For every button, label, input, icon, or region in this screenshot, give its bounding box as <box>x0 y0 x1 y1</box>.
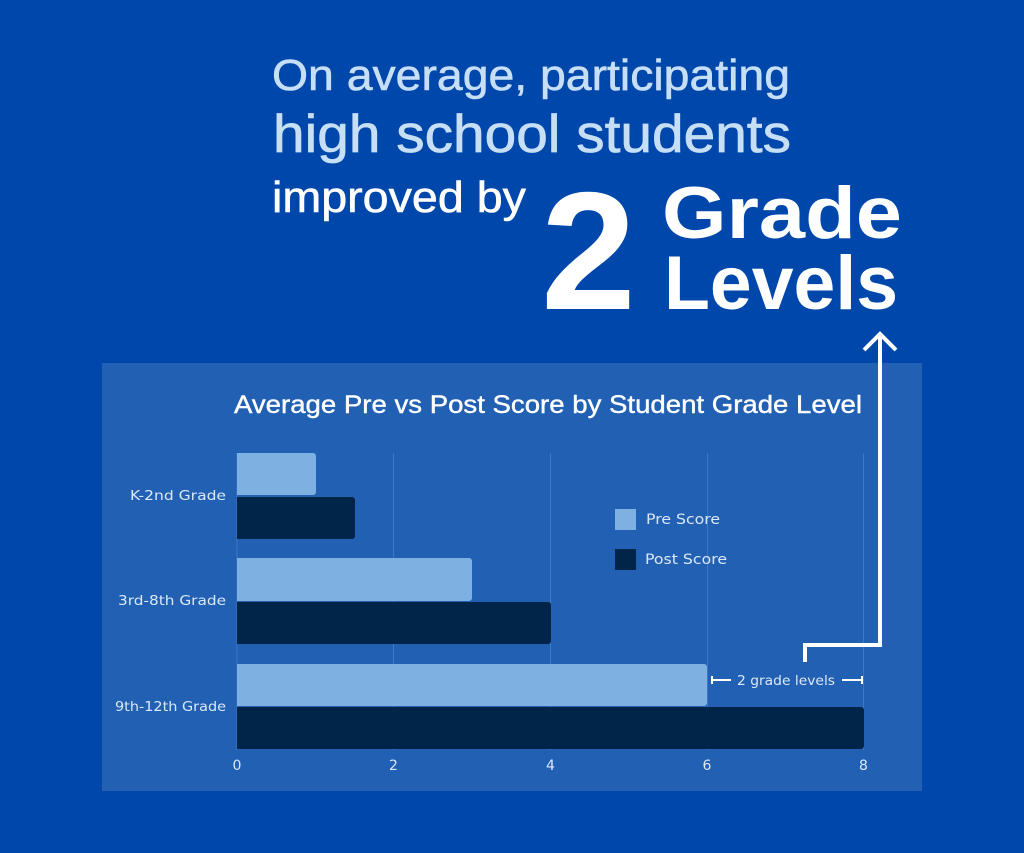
legend: Post Score <box>645 552 727 568</box>
headline <box>272 51 791 222</box>
panel: bar chart <box>102 363 922 791</box>
category labels: K-2nd Grade <box>130 488 226 504</box>
bars: K-2nd Grade <box>237 453 355 539</box>
big stat: 2 grade levels <box>541 157 902 345</box>
x axis labels: 6 <box>703 758 712 774</box>
bars: 9th-12th Grade <box>237 664 864 749</box>
word Grade: Grade <box>662 173 902 254</box>
category labels: 3rd-8th Grade <box>118 593 226 609</box>
annotation: 2 grade levels <box>712 673 862 689</box>
x axis labels: 8 <box>859 758 868 774</box>
word Levels: Levels <box>664 241 898 326</box>
category labels: 9th-12th Grade <box>115 699 226 715</box>
panel background <box>102 363 922 791</box>
x axis labels <box>233 758 868 774</box>
arrow: from chart to headline <box>805 334 896 662</box>
x axis labels: 4 <box>546 758 555 774</box>
category labels <box>115 488 226 715</box>
x axis labels: 0 <box>233 758 241 774</box>
legend <box>615 509 727 570</box>
x axis labels: 2 <box>389 758 398 774</box>
headline line 3: improved by <box>272 173 526 222</box>
chart title: Average Pre vs Post Score by Student Grade Level <box>234 391 862 419</box>
legend: Pre Score <box>646 512 720 528</box>
bars: 3rd-8th Grade <box>237 558 551 644</box>
headline line 2: high school students <box>273 105 791 164</box>
headline line 1: On average, participating <box>272 51 790 100</box>
annotation: 2 grade levels: 2 grade levels <box>737 673 835 689</box>
big number 2: 2 <box>541 157 636 345</box>
